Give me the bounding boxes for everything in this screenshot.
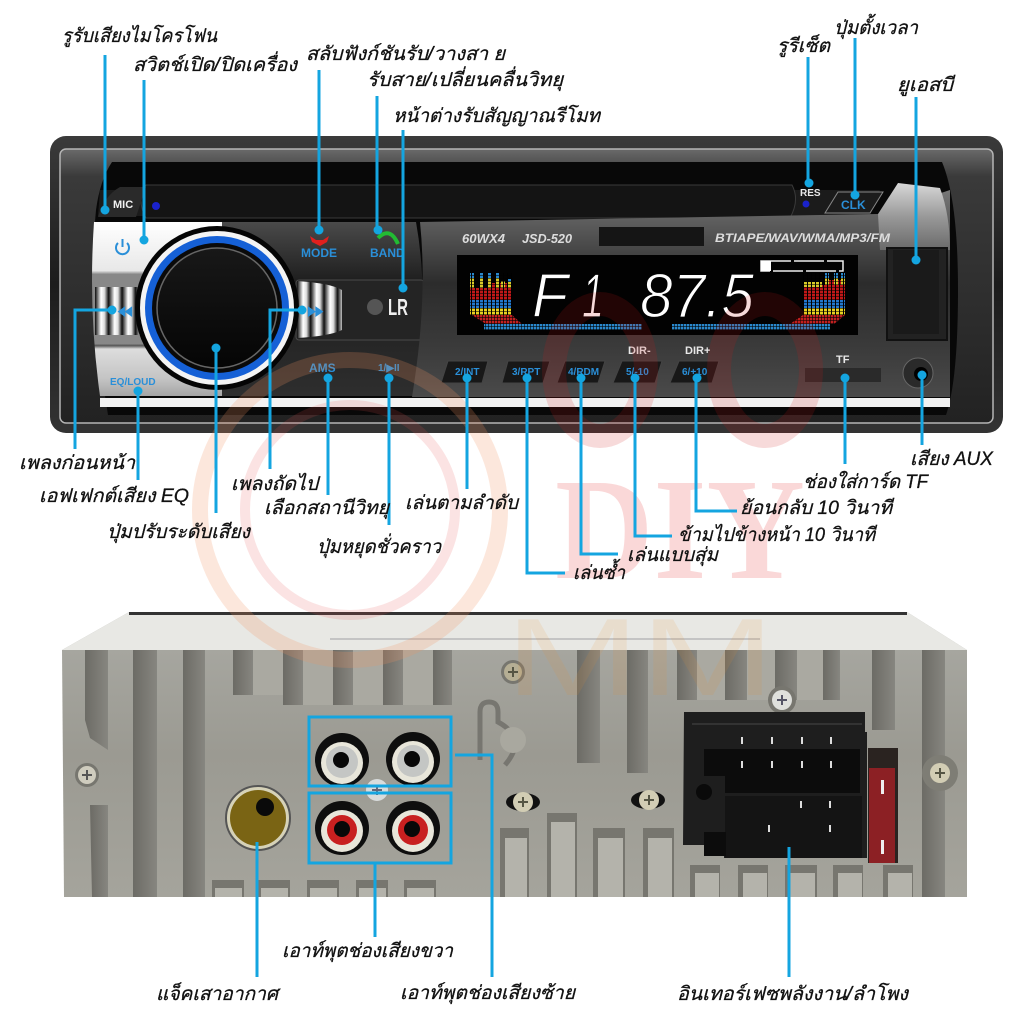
button labels: BAND [370,246,405,260]
tuner frequency: 87.5 [640,262,754,331]
screw top centre [501,660,525,684]
dotted baselines [484,324,642,330]
leader lines and dots [75,38,926,977]
DIR labels: DIR+ [685,345,710,357]
faint watermark [200,304,811,719]
callout labels: ช่องใส่การ์ด TF [803,470,929,493]
preset buttons: 4/RDM [568,367,599,378]
callout labels: เพลงถัดไป [231,472,321,495]
R logo: LR [388,294,408,320]
callout labels: สลับฟังก์ชันรับ/วางสา ย [306,43,507,65]
black plate [599,227,704,246]
callout labels: รูรีเซ็ต [777,34,832,57]
button labels: EQ/LOUD [110,377,156,388]
white bottom strip [100,398,950,407]
antenna socket [226,786,290,850]
button labels: 1/▶II [378,363,400,374]
right silver panel [878,183,950,250]
RCA red left [315,801,369,855]
model text: JSD-520 [522,232,572,246]
TF slot [805,368,881,382]
faint watermark: DIY [555,450,805,610]
callout labels: สวิตช์เปิด/ปิดเครื่อง [133,51,299,76]
button labels: MODE [301,246,337,260]
faint watermark: MM [505,596,775,719]
preset buttons: 3/RPT [512,367,540,378]
prev glyph: ◀◀ [117,303,133,318]
blue LED [152,202,160,210]
screw centre RCA [366,779,388,801]
tuner frequency: 1 [582,262,604,331]
callout labels: เอาท์พุตช่องเสียงขวา [282,940,454,962]
RCA white left [315,733,369,787]
level bar [761,261,843,271]
model text: 60WX4 [462,232,505,246]
prev ridges [95,287,140,335]
callout labels: เพลงก่อนหน้า [19,453,136,474]
USB port [887,248,947,340]
front panel of the stereo [50,136,1003,433]
tuner frequency [532,262,754,331]
DIR labels [628,188,850,366]
tuner frequency: F [532,262,571,331]
RCA white right [386,732,440,786]
RCA red right [386,801,440,855]
preset buttons [441,361,719,383]
display [457,255,858,335]
callout labels: ปุ่มหยุดชั่วคราว [317,533,442,558]
top heat-sink channels [85,650,945,897]
DIR labels: RES [800,188,821,199]
preset buttons: 5/-10 [626,367,649,378]
format text: BTIAPE/WAV/WMA/MP3/FM [715,231,891,245]
callout labels: หน้าต่างรับสัญญาณรีโมท [393,104,601,127]
screw middle right [631,790,665,810]
display right equalizer [790,273,845,324]
callout labels: เล่นซ้ำ [573,558,626,584]
callout labels: เอฟเฟกต์เสียง EQ [39,485,189,507]
MIC label: MIC [113,199,133,211]
callout labels: ยูเอสบี [897,74,956,96]
screw right [922,755,958,791]
callout labels: ปุ่มตั้งเวลา [834,13,919,39]
callout labels: เล่นตามลำดับ [405,493,520,514]
volume knob [135,226,299,390]
DIR labels: TF [836,354,850,366]
AUX jack [903,358,933,388]
USB inner [893,250,939,334]
central panel [412,190,950,397]
button labels [110,246,405,388]
button labels: AMS [309,361,336,375]
next ridges [297,281,342,338]
power speaker connector [683,712,867,858]
power icon [116,239,129,254]
screw connector [768,686,796,714]
callout labels: รับสาย/เปลี่ยนคลื่นวิทยุ [367,66,565,91]
callout labels: ย้อนกลับ 10 วินาที [740,497,895,519]
callout labels: อินเทอร์เฟซพลังงาน/ลำโพง [677,982,910,1005]
callout labels: ข้ามไปข้างหน้า 10 วินาที [678,523,878,546]
keyhole slot [480,702,515,765]
silver left panel [92,222,222,396]
inset fin faces [253,650,823,705]
callout labels: เล่นแบบสุ่ม [627,545,719,566]
remote sensor [367,299,383,315]
bottom blocks [212,813,913,897]
dark button panel [222,222,423,396]
fuse [868,748,898,863]
reset LED [802,200,810,208]
callout labels: ปุ่มปรับระดับเสียง [107,521,252,543]
band icon [378,233,398,244]
preset buttons: 6/+10 [682,367,708,378]
screw middle left [506,792,540,812]
rear panel of the stereo [62,612,967,897]
CLK button [825,192,883,213]
callout labels: เอาท์พุตช่องเสียงซ้าย [400,982,577,1004]
callout labels: เสียง AUX [910,448,994,470]
display left equalizer [470,273,522,324]
model text [462,232,572,246]
CLK label: CLK [841,198,866,212]
screw left [75,763,99,787]
callout labels: รูรับเสียงไมโครโฟน [62,24,218,47]
next glyph: ▶▶ [307,303,324,318]
preset buttons: 2/INT [455,367,479,378]
callout labels: เลือกสถานีวิทยุ [264,497,391,519]
callout labels: แจ็คเสาอากาศ [156,982,281,1005]
DIR labels: DIR- [628,345,651,357]
mode icon [310,236,329,246]
